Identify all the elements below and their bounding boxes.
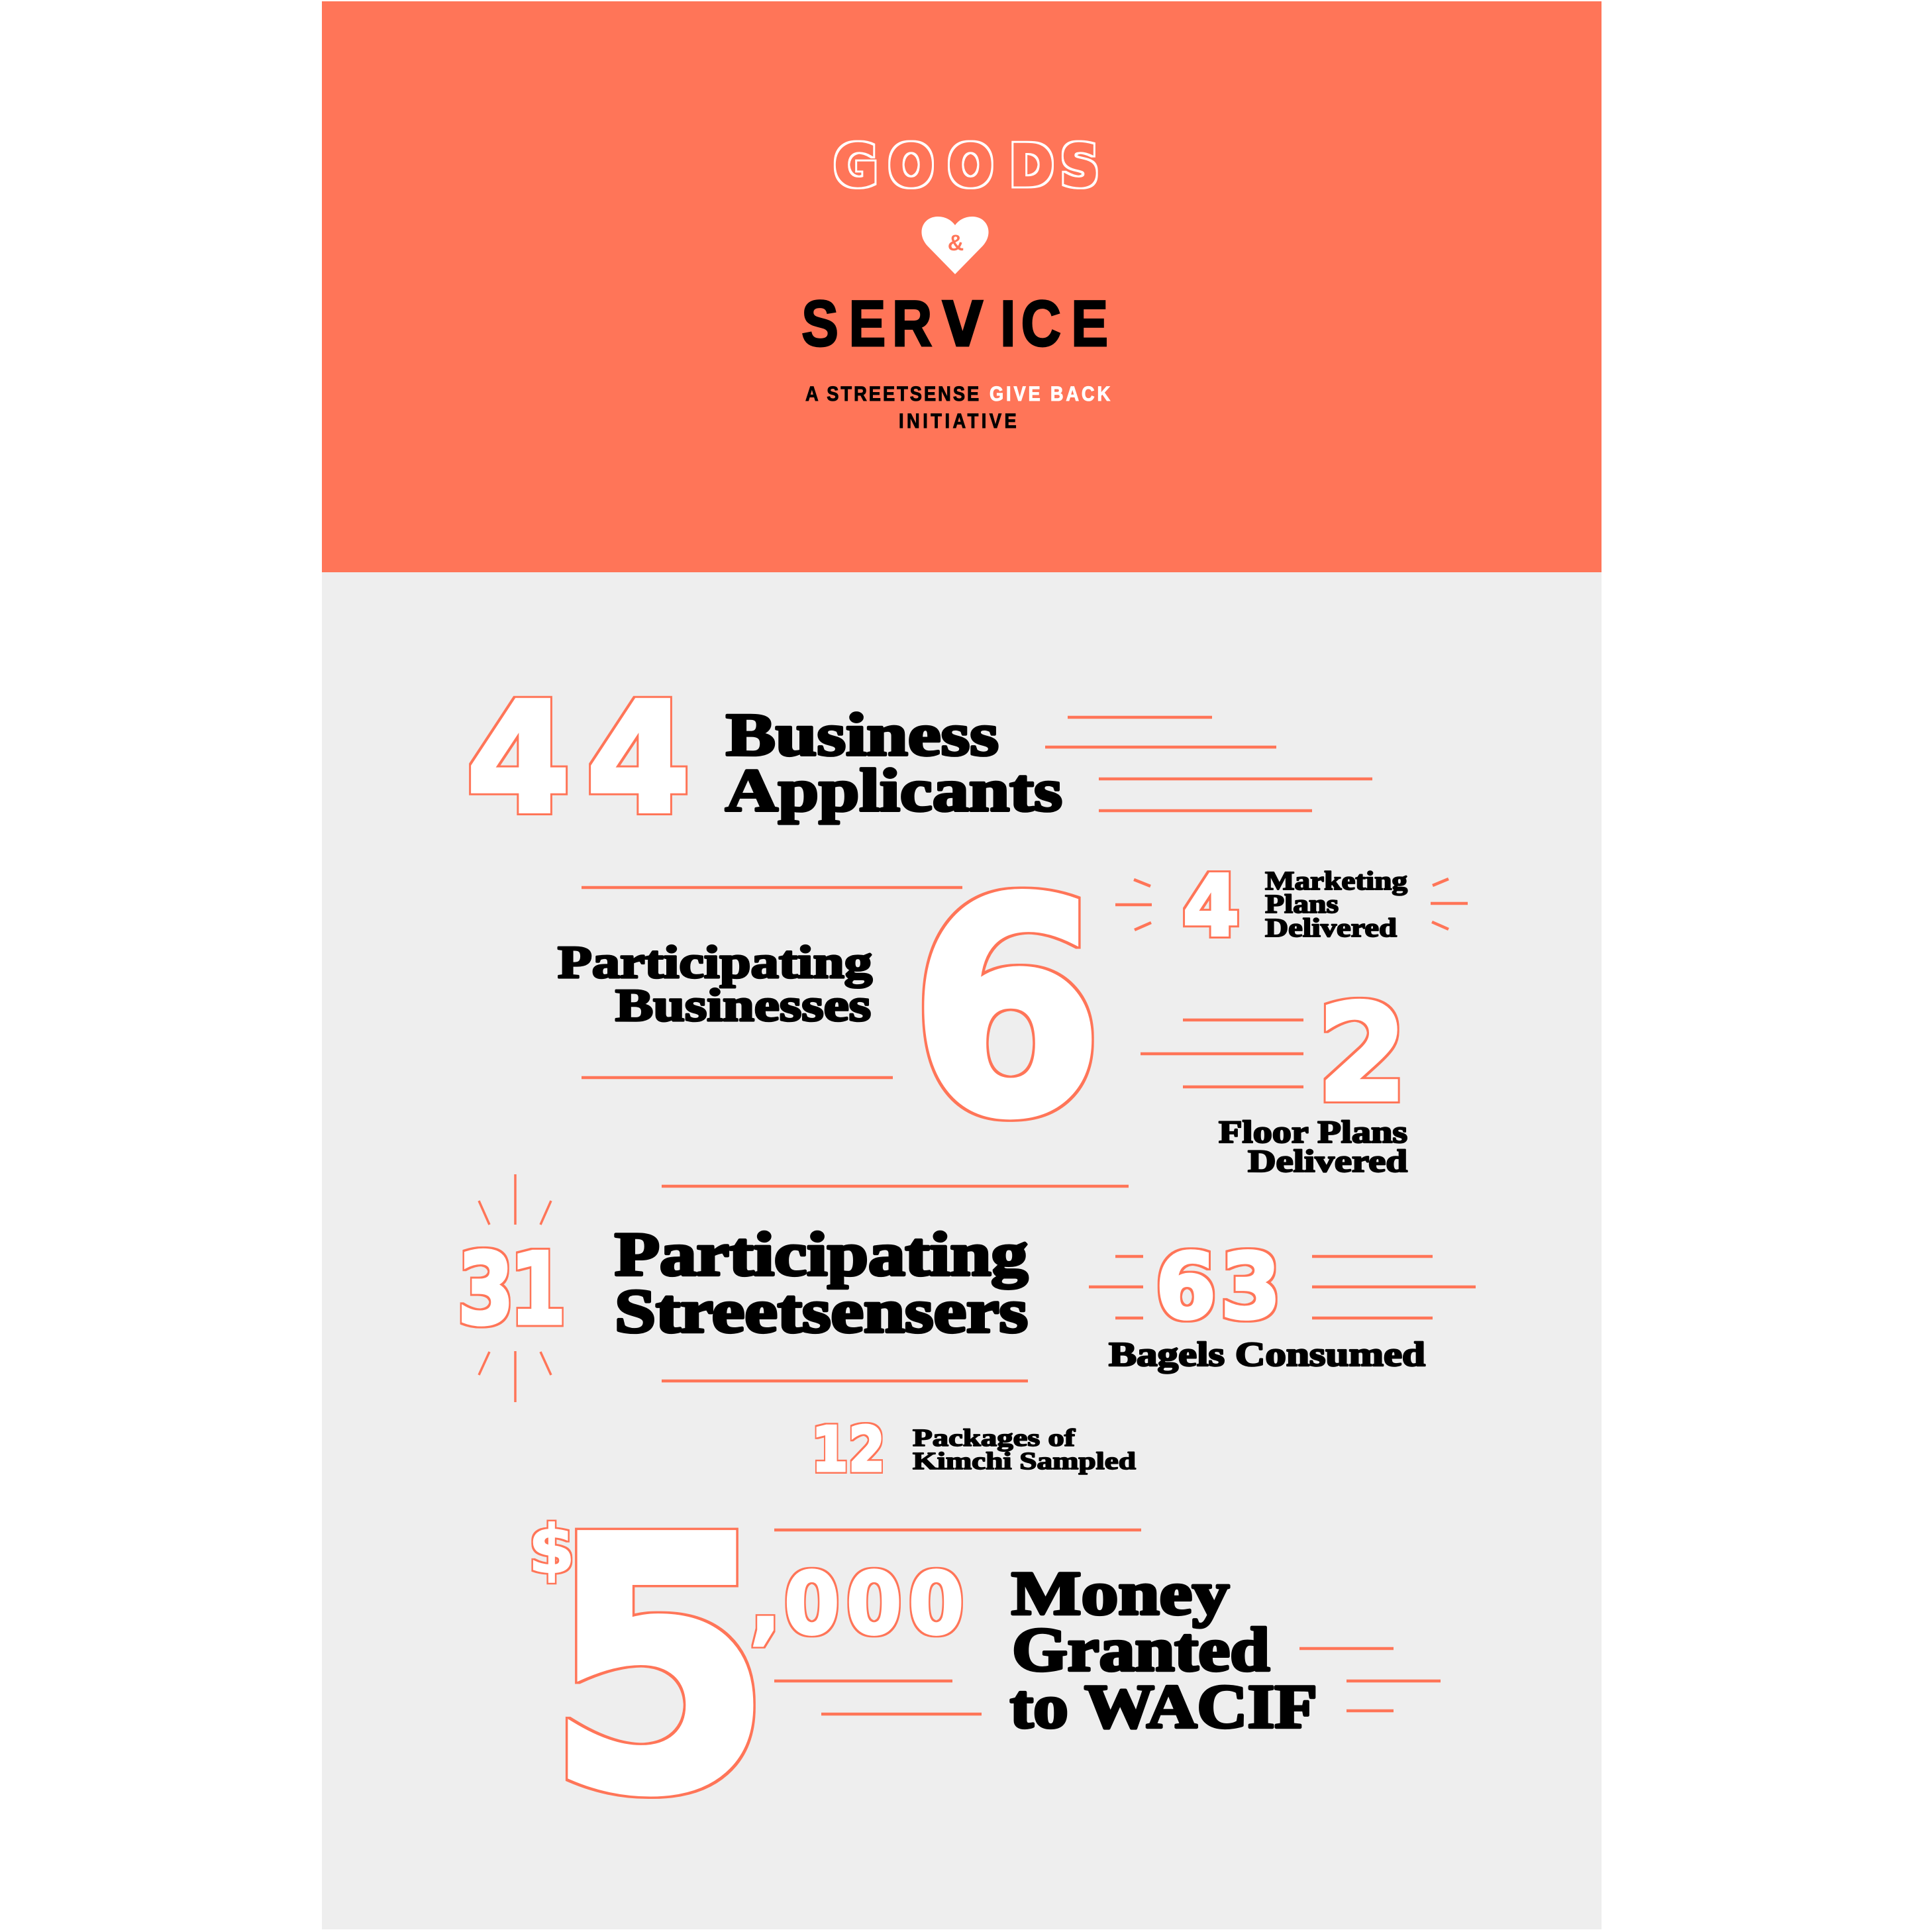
title: SERVICE: SERV ICE xyxy=(801,287,1108,360)
number: 6: 6 xyxy=(910,837,1103,1182)
title: GOODS: GOODS xyxy=(834,133,1099,199)
label: Money Granted to WACIF: Granted xyxy=(1012,1615,1270,1684)
label: Business Applicants xyxy=(725,701,1062,824)
number: 2: 2 xyxy=(1317,976,1407,1131)
label: Participating Businesses: Participating xyxy=(558,937,872,988)
subtitle: A STREETSENSE xyxy=(805,382,979,405)
label: Business Applicants: Business xyxy=(726,701,999,768)
label: Floor Plans Delivered: Floor Plans xyxy=(1219,1115,1407,1150)
stat: 63 Bagels Consumed xyxy=(1089,1235,1476,1374)
subtitle xyxy=(805,382,1111,432)
label: Marketing Plans Delivered xyxy=(1265,866,1407,942)
number: 12: 12 xyxy=(811,1413,885,1485)
panel: grey body background xyxy=(322,572,1602,1929)
label: Marketing Plans Delivered: Marketing xyxy=(1265,866,1407,895)
number: $5,000: ,000 xyxy=(750,1554,964,1654)
label: Packages of Kimchi Sampled: Kimchi Sampled xyxy=(913,1448,1137,1475)
label: Bagels Consumed: Bagels Consumed xyxy=(1109,1336,1425,1374)
label: Money Granted to WACIF: to WACIF xyxy=(1010,1672,1317,1741)
label: Participating Businesses xyxy=(558,937,872,1031)
label: Business Applicants: Applicants xyxy=(725,756,1062,824)
icon: heart with ampersand: & xyxy=(948,230,964,256)
label: Floor Plans Delivered xyxy=(1219,1115,1407,1179)
stat: 4 Marketing Plans Delivered xyxy=(1115,857,1468,955)
label: Marketing Plans Delivered: Delivered xyxy=(1265,913,1397,942)
number: 44: 44 xyxy=(467,670,689,846)
label: Participating Streetsensers xyxy=(615,1220,1028,1346)
number: 31: 31 xyxy=(458,1233,566,1347)
subtitle: GIVE BACK xyxy=(990,382,1111,405)
number: 63: 63 xyxy=(1156,1235,1281,1339)
number: $5,000: 5 xyxy=(546,1464,773,1871)
subtitle: INITIATIVE xyxy=(899,409,1017,432)
number: $5,000 xyxy=(529,1464,964,1871)
label: Money Granted to WACIF xyxy=(1010,1559,1317,1741)
label: Participating Streetsensers: Streetsensers xyxy=(615,1277,1028,1346)
stat: 44 Business Applicants xyxy=(467,670,1372,846)
label: Money Granted to WACIF: Money xyxy=(1011,1559,1229,1628)
stat: 2 Floor Plans Delivered xyxy=(1141,976,1407,1179)
stat: $5,000 Money Granted to WACIF xyxy=(529,1464,1441,1871)
label: Packages of Kimchi Sampled: Packages of xyxy=(913,1425,1076,1452)
panel: coral header xyxy=(322,1,1602,572)
number: $5,000: $ xyxy=(529,1511,575,1588)
label: Packages of Kimchi Sampled xyxy=(913,1425,1137,1475)
stat: 12 Packages of Kimchi Sampled xyxy=(811,1413,1137,1485)
label: Participating Businesses: Businesses xyxy=(615,980,871,1031)
number: 4: 4 xyxy=(1183,857,1239,955)
label: Floor Plans Delivered: Delivered xyxy=(1248,1144,1407,1179)
label: Participating Streetsensers: Participating xyxy=(615,1220,1028,1289)
label: Marketing Plans Delivered: Plans xyxy=(1265,889,1339,919)
stat: 31 Participating Streetsensers xyxy=(458,1174,1129,1402)
stat: 6 Participating Businesses xyxy=(558,837,1103,1182)
icon: heart with ampersand xyxy=(921,217,989,274)
